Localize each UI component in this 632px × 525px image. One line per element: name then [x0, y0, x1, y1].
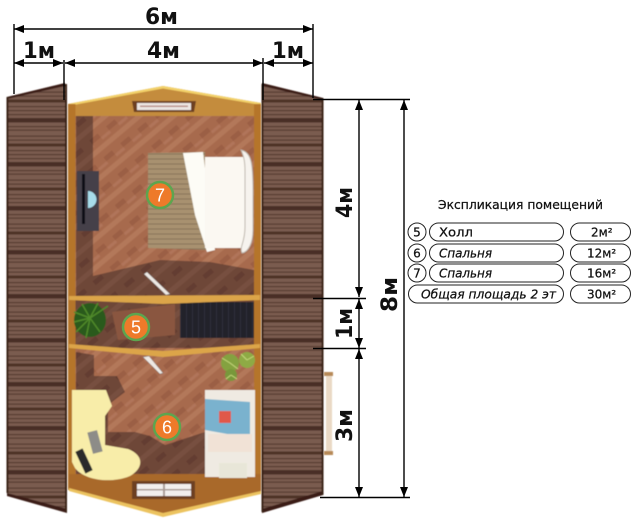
stairs — [180, 302, 254, 338]
legend total row: 30м² — [587, 288, 616, 302]
side wall right — [254, 104, 261, 490]
icon: room 6 marker — [154, 414, 180, 440]
dimension label: 4m top: 4м — [147, 39, 180, 64]
icon: corner desk and chair — [72, 390, 140, 480]
side wall left — [68, 104, 76, 490]
dimension label: 6m: 6м — [145, 5, 178, 30]
panel: left roof slope — [6, 83, 67, 513]
legend total row: Общая площадь 2 эт — [421, 288, 557, 302]
legend row 5: 2м² — [591, 226, 613, 240]
icon: room 7 marker: 7 — [155, 186, 165, 206]
upper partition beam — [69, 295, 260, 304]
icon: lower rail — [143, 356, 163, 374]
icon: upper rail — [144, 272, 170, 295]
icon: room 5 marker — [123, 314, 149, 340]
legend row 5: Холл — [439, 226, 473, 240]
dimension label: 3m vertical: 3м — [333, 409, 358, 442]
legend row 7 — [408, 264, 630, 282]
icon: hall plant — [74, 303, 108, 338]
legend row 5 — [408, 223, 630, 241]
legend row 7: Спальня — [439, 266, 492, 280]
icon: balcony railing — [324, 372, 333, 455]
legend row 6 — [408, 244, 630, 262]
icon: room 5 marker: 5 — [131, 318, 141, 338]
legend row 5: 5 — [413, 226, 421, 240]
icon: quilted bed — [205, 390, 255, 478]
legend row 7: 16м² — [587, 266, 616, 280]
room 7 floor — [68, 115, 261, 297]
hall light patch — [112, 304, 175, 340]
room 6 floor — [68, 348, 261, 478]
legend table — [408, 198, 630, 303]
vertical dimension lines — [313, 100, 410, 498]
legend row 7: 7 — [413, 266, 421, 280]
bottom window — [132, 481, 195, 499]
panel: floor plan interior — [68, 86, 333, 517]
lower partition beam — [69, 344, 260, 357]
dimension label: 8m vertical: 8м — [378, 277, 403, 312]
dimension label: 1m vertical: 1м — [333, 308, 358, 339]
top ceiling highlight — [68, 86, 261, 106]
horizontal dimension lines — [14, 24, 313, 100]
bottom floor band — [69, 474, 261, 516]
legend total row — [408, 285, 630, 303]
icon: room 6 marker: 6 — [162, 418, 172, 438]
dimension label: 1m right: 1м — [272, 39, 304, 64]
top ceiling band — [68, 86, 261, 116]
room 6 shadow — [76, 352, 205, 476]
bottom floor edge — [69, 488, 261, 517]
legend row 6: 12м² — [587, 246, 616, 260]
dimension label: 4m vertical: 4м — [333, 187, 358, 218]
icon: double bed — [148, 150, 253, 253]
dimension label: 1m left: 1м — [23, 39, 55, 64]
icon: TV unit — [77, 171, 99, 231]
icon: room 6 plant — [221, 352, 255, 381]
room 7 shadow — [76, 115, 254, 296]
panel: right roof slope — [262, 83, 324, 513]
legend row 6: 6 — [413, 246, 421, 260]
legend title: Экспликация помещений — [438, 198, 603, 212]
icon: room 7 marker — [147, 182, 173, 208]
hall floor — [68, 300, 261, 348]
top window — [132, 101, 196, 112]
legend row 6: Спальня — [439, 246, 492, 260]
